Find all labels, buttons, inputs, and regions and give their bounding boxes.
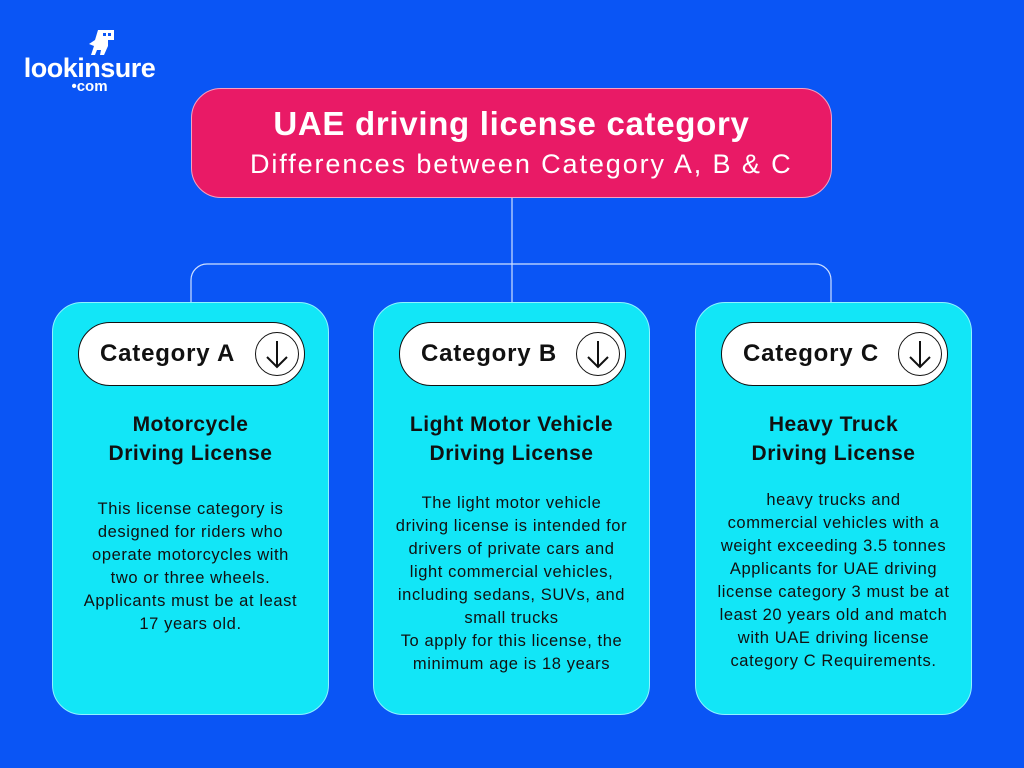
panel: category C: license category 3 must be at	[717, 583, 950, 601]
panel: category A: Applicants must be at least	[84, 592, 297, 610]
panel: category B: To apply for this license, the	[401, 632, 622, 650]
panel: category C: with UAE driving license	[738, 629, 929, 647]
panel: category B: drivers of private cars and	[408, 540, 615, 558]
panel: category C: Driving License	[752, 442, 915, 465]
panel: category B: Light Motor Vehicle	[410, 413, 613, 436]
panel: category A: designed for riders who	[98, 523, 283, 541]
panel: category B: Category B	[421, 340, 557, 367]
panel: category A	[52, 302, 329, 715]
panel: category A: 17 years old.	[139, 615, 242, 633]
panel: category C: least 20 years old and match	[720, 606, 947, 624]
panel: category C: Category C	[743, 340, 879, 367]
panel: category A: Category A	[100, 340, 235, 367]
logo	[24, 30, 155, 95]
panel: category B: The light motor vehicle	[422, 494, 601, 512]
panel: category A: operate motorcycles with	[92, 546, 289, 564]
panel: category C: Heavy Truck	[769, 413, 898, 436]
panel: category A: two or three wheels.	[111, 569, 270, 587]
panel: category A: Driving License	[109, 442, 272, 465]
panel: category A: Motorcycle	[133, 413, 248, 436]
panel: category B: driving license is intended for	[396, 517, 627, 535]
title box: Differences between Category A, B & C	[250, 149, 793, 179]
panel: category B: light commercial vehicles,	[410, 563, 613, 581]
title box	[191, 88, 832, 198]
panel: category C: category C Requirements.	[730, 652, 937, 670]
panel: category A: This license category is	[98, 500, 283, 518]
panel: category C: commercial vehicles with a	[728, 514, 939, 532]
panel: category C: Applicants for UAE driving	[730, 560, 937, 578]
logo: •com	[71, 78, 108, 95]
title box: UAE driving license category	[273, 105, 750, 142]
panel: category B: minimum age is 18 years	[413, 655, 610, 673]
panel: category C	[695, 302, 972, 715]
panel: category B: Driving License	[430, 442, 593, 465]
panel: category B	[373, 302, 650, 715]
panel: category B: including sedans, SUVs, and	[398, 586, 625, 604]
panel: category B: small trucks	[464, 609, 559, 627]
panel: category C: heavy trucks and	[766, 491, 901, 509]
logo: lookinsure	[24, 53, 155, 83]
panel: category C: weight exceeding 3.5 tonnes	[721, 537, 946, 555]
